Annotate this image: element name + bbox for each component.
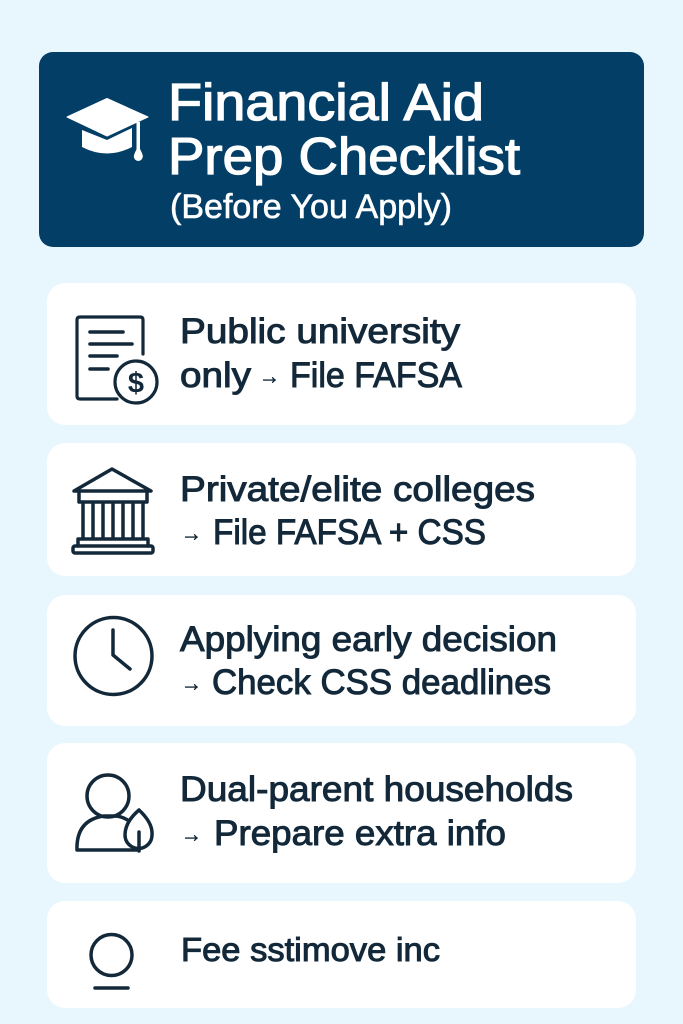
heading: title: Prep Checklist: [168, 128, 521, 186]
text: dual-parent households: Prepare extra info: [214, 813, 506, 853]
panel: dual-parent households: [47, 743, 636, 883]
panel: header banner: [39, 52, 644, 247]
icon: bank building: [73, 469, 153, 553]
heading: title: [168, 74, 521, 186]
text: early decision: Applying early decision: [180, 619, 557, 659]
text: private colleges: →: [181, 520, 202, 546]
heading: title: Financial Aid: [168, 74, 484, 132]
panel: private colleges: [47, 443, 636, 576]
text: early decision: Check CSS deadlines: [212, 662, 551, 702]
text: dual-parent households: [180, 769, 573, 853]
subheading: (Before You Apply): [170, 188, 452, 226]
text: dual-parent households: Dual-parent households: [180, 769, 573, 809]
text: public university: Public university: [180, 311, 460, 351]
text: private colleges: File FAFSA + CSS: [213, 512, 486, 552]
text: public university: only: [180, 355, 251, 395]
icon: person with leaf: [77, 775, 152, 851]
panel: public university: [47, 283, 636, 425]
text: early decision: [180, 619, 557, 702]
text: private colleges: Private/elite colleges: [180, 469, 535, 509]
text: public university: →: [259, 363, 280, 389]
text: early decision: →: [181, 670, 202, 696]
text: dual-parent households: →: [181, 821, 202, 847]
panel: early decision: [47, 595, 636, 726]
icon: clock: [75, 618, 152, 694]
icon: document with dollar: [77, 317, 157, 403]
text: private colleges: [180, 469, 535, 552]
panel: fee estimate: [47, 901, 636, 1008]
text: public university: [180, 311, 462, 395]
text: fee estimate: Fee sstimove inc: [181, 931, 440, 968]
icon: graduation cap: [67, 98, 148, 161]
icon: document with dollar: $: [128, 368, 144, 400]
icon: circle with underline: [91, 934, 132, 988]
text: public university: File FAFSA: [290, 355, 462, 395]
